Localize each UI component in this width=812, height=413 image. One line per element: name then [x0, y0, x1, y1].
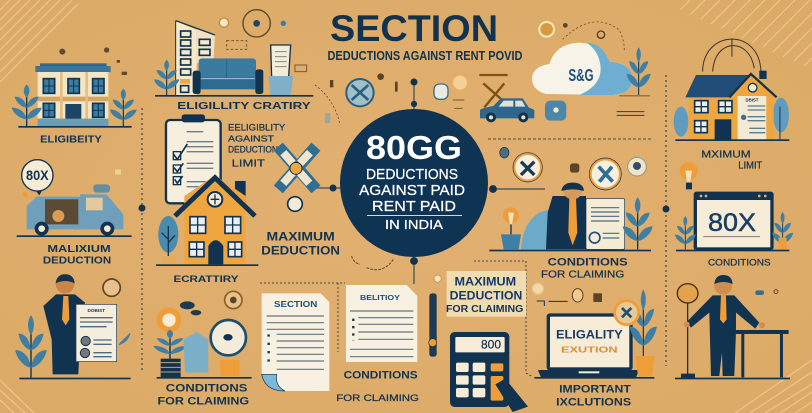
text: eligibility against deduction limit: EELIGIBLITY: [228, 123, 285, 133]
label: conditions for claiming: FOR CLAIMING: [541, 270, 624, 281]
text: eligibility against deduction limit: AGAINST: [228, 134, 274, 144]
panel: eligibility criteria tower and sofa: [154, 10, 398, 211]
icon: cloud: S&G: [568, 65, 594, 85]
panel: 80X monitor: [675, 192, 793, 379]
small icons: [288, 73, 398, 211]
small icons row: [533, 283, 602, 306]
icon: laptop: EXUTION: [561, 345, 618, 355]
text: deductions against paid rent paid: RENT PAID: [372, 198, 456, 215]
document: second section: [346, 285, 417, 362]
icon: orange magnifier flower: [153, 308, 186, 377]
icon: blue shape: [183, 332, 208, 373]
icon: truck: [17, 169, 132, 237]
subtitle: DEDUCTIONS AGAINST RENT POVID: [328, 49, 522, 63]
icon: car with x stand: [479, 75, 534, 122]
label: conditions: CONDITIONS: [344, 369, 418, 381]
label: eligibility criteria: ELIGILLITY CRATIRY: [177, 101, 311, 112]
small marks: [59, 47, 127, 75]
panel: 80X truck maximum deduction: [17, 160, 132, 266]
label: ecrattiry: ECRATTIRY: [173, 274, 239, 284]
icons: rings: [219, 10, 307, 72]
icon: sofa: [193, 58, 263, 94]
icon: clipboard: [166, 114, 221, 203]
icon: document: [586, 199, 625, 249]
icon: person: [43, 274, 85, 374]
label: conditions for claiming: CONDITIONS: [166, 383, 248, 395]
panel: right column house and cloud: [434, 22, 789, 190]
ground line: [489, 250, 651, 251]
icon: calculator: [450, 332, 528, 412]
icon: ring and marks: [180, 291, 242, 315]
callout: maximum deduction: DEDUCTION: [450, 289, 522, 303]
panel: eligibility building: [12, 47, 137, 145]
document: section: [262, 293, 329, 391]
icon: cloud: [532, 22, 651, 96]
icon: house: [156, 175, 258, 266]
text: eligibility against deduction limit: DEDUCTION: [228, 145, 278, 155]
icon: house with document: DBIST: [745, 97, 759, 102]
ground line: [534, 377, 654, 379]
icon: certificate: DOBIST: [88, 308, 105, 313]
label: for claiming: FOR CLAIMING: [336, 393, 419, 403]
callout: maximum deduction: [446, 271, 526, 317]
icon: light bulb: [680, 162, 698, 189]
small icon under circle: [352, 256, 393, 270]
heading: 80GG: 80GG: [366, 129, 462, 166]
connector lines and nodes: [139, 75, 669, 377]
icon: laptop: ELIGALITY: [556, 328, 623, 342]
label: conditions for claiming: [541, 256, 628, 281]
label: important exclusions: IXCLUTIONS: [556, 396, 631, 408]
label: maximum deduction center: DEDUCTION: [261, 243, 340, 257]
small badge icons near circle: [434, 75, 468, 108]
label: conditions for claiming: [157, 383, 249, 407]
icon: person with lamp and desk: [675, 275, 790, 379]
icon: blue button and bar: [545, 101, 644, 121]
label: eligibility: ELIGIBEITY: [40, 134, 102, 145]
ground line: [155, 95, 313, 97]
icon: document on stand: [268, 45, 293, 95]
label: conditions: CONDITIONS: [708, 257, 771, 267]
panel: central house: [156, 175, 393, 284]
label: maximum deduction: MALIXIUM: [47, 244, 111, 255]
central circle: [340, 109, 488, 257]
icon: laptop: [538, 313, 639, 377]
text: deductions against paid rent paid: DEDUCTIONS: [366, 166, 458, 183]
label: maximum limit: [701, 149, 762, 171]
label: conditions for claiming: FOR CLAIMING: [157, 395, 249, 407]
panel: maximum deduction box and calculator: [429, 271, 528, 412]
icon: monitor: [694, 192, 774, 250]
icon: ring: [103, 279, 120, 296]
text: in india: IN INDIA: [385, 217, 443, 232]
panel: section documents: [262, 285, 419, 403]
text: deductions against paid rent paid: [359, 166, 465, 215]
icon: x cross: [278, 147, 316, 189]
label: maximum deduction: [43, 244, 111, 266]
icon: gauge bar: [429, 275, 441, 357]
panel: important exclusions laptop: [533, 283, 657, 408]
icon: blue blob: [521, 209, 549, 249]
icon: plant: [623, 197, 653, 249]
icons: plants: [675, 212, 793, 249]
ground line: [19, 378, 131, 379]
icon: house with document: [674, 38, 789, 141]
icon: person: [546, 183, 588, 249]
icon: monitor: 80X: [708, 209, 756, 237]
icon: building: [12, 63, 137, 128]
icon: plant: [15, 315, 47, 378]
label: important exclusions: [556, 384, 631, 408]
ground line: [676, 250, 789, 251]
label: maximum limit: LIMIT: [738, 160, 762, 171]
icon: calculator: 800: [481, 338, 501, 352]
text: deductions against paid rent paid: AGAINST PAID: [359, 182, 465, 199]
callout: maximum deduction: FOR CLAIMING: [446, 304, 523, 315]
panel: conditions for claiming person: [489, 183, 653, 281]
divider: [367, 215, 462, 216]
icons: tool rings: [500, 147, 646, 190]
icon: magnifier x: [615, 289, 657, 376]
callout: maximum deduction: MAXIMUM: [454, 274, 516, 288]
label: important exclusions: IMPORTANT: [559, 384, 631, 396]
label: conditions for claiming: CONDITIONS: [548, 256, 628, 268]
icon: crossed badge: [346, 79, 374, 106]
panel: person with document: [15, 274, 131, 379]
icon: tower: [154, 21, 215, 95]
document: second section: BELITIOY: [360, 293, 400, 302]
text: eligibility against deduction limit: [228, 123, 285, 170]
panel: conditions for claiming plants: [153, 291, 252, 407]
icon: dial: [211, 320, 246, 376]
label: maximum deduction center: MAXIMUM: [266, 229, 335, 243]
label: maximum limit: MXIMUM: [701, 149, 751, 160]
icon: bulb and pot: [501, 207, 521, 249]
title: SECTION: [330, 8, 498, 49]
label: maximum deduction center: [261, 229, 340, 257]
document: section: SECTION: [274, 299, 317, 309]
label: maximum deduction: DEDUCTION: [43, 255, 111, 266]
icon: speech bubble 80X: 80X: [26, 167, 49, 183]
ground line: [157, 377, 252, 379]
text: eligibility against deduction limit: LIMIT: [232, 159, 265, 170]
